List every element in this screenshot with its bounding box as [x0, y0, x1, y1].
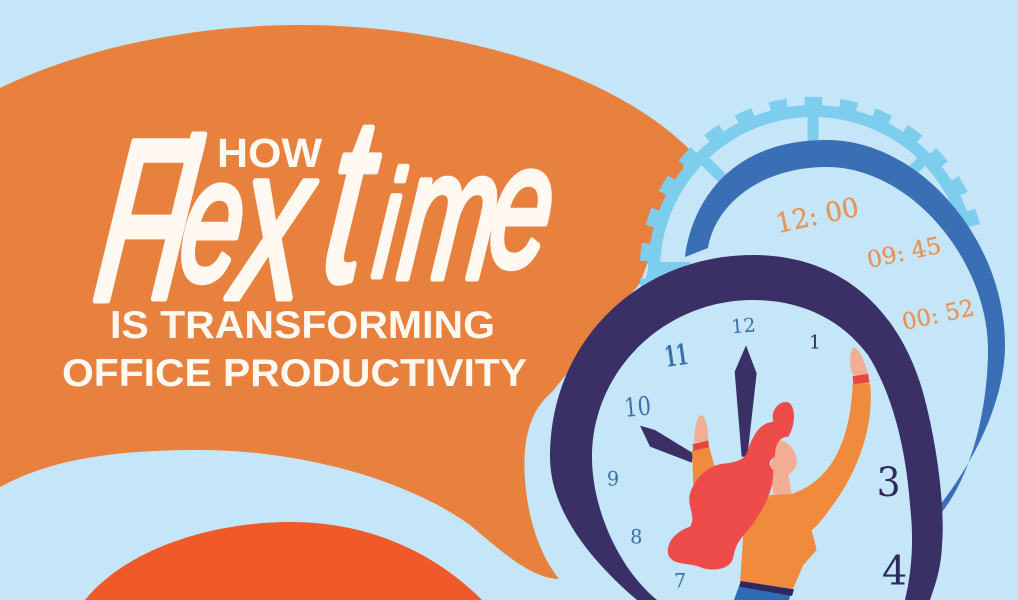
clock numbers: 1	[809, 332, 821, 353]
Flextime: e	[481, 108, 565, 304]
clock numbers: 11	[662, 337, 690, 374]
gear base wedge	[642, 262, 692, 292]
clock numbers	[607, 313, 907, 594]
body and right arm	[740, 383, 871, 592]
clock numbers: 7	[674, 570, 686, 593]
Flextime: i	[367, 140, 411, 308]
woman reaching for the clock	[668, 347, 871, 600]
Flextime: l	[145, 95, 211, 346]
dark clock ring	[550, 255, 943, 600]
time 09:45: 09: 45	[865, 233, 944, 274]
Flextime: e	[171, 122, 256, 318]
jeans	[733, 583, 792, 600]
left arm	[692, 447, 716, 485]
clock numbers: 12	[730, 313, 757, 338]
Flextime: F	[85, 92, 210, 349]
OFFICE PRODUCTIVITY: OFFICE PRODUCTIVITY	[62, 352, 527, 395]
HOW: HOW	[217, 130, 322, 176]
IS TRANSFORMING: IS TRANSFORMING	[110, 304, 495, 347]
title	[62, 67, 570, 395]
clock numbers: 8	[630, 525, 642, 548]
Flextime: m	[391, 112, 511, 317]
time 00:52: 00: 52	[900, 295, 977, 336]
clock numbers: 4	[882, 546, 907, 594]
clock numbers: 10	[623, 392, 652, 424]
clock numbers: 9	[607, 468, 619, 491]
clock hands	[640, 345, 757, 463]
gear dial	[640, 96, 980, 287]
digital times	[773, 192, 977, 336]
hair	[668, 402, 794, 570]
clock face and figure	[607, 313, 907, 600]
clock numbers: 3	[877, 458, 901, 506]
Flextime: x	[219, 98, 328, 345]
face and neck	[770, 440, 797, 495]
time 12:00: 12: 00	[773, 192, 862, 240]
gear spokes	[697, 115, 926, 180]
Flextime: t	[313, 67, 391, 330]
red-orange circle at the bottom	[85, 522, 482, 600]
blue arc	[685, 140, 1005, 512]
orange speech bubble	[0, 25, 690, 579]
